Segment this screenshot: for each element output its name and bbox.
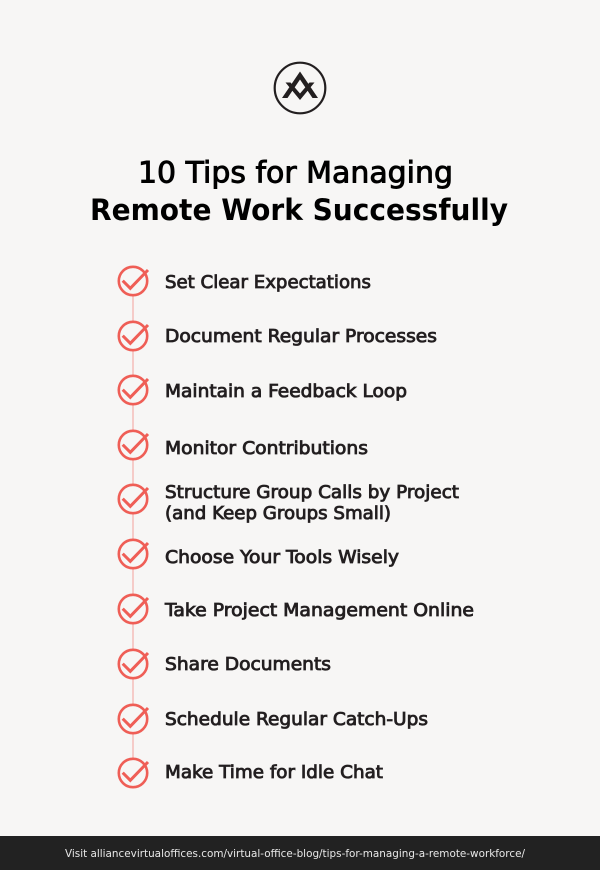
title: Remote Work Successfully: [90, 193, 508, 227]
item 5: Structure Group Calls by Project: [165, 482, 459, 503]
item 4: [118, 430, 368, 460]
checklist: [118, 266, 474, 788]
title: [90, 156, 508, 227]
item 1: Set Clear Expectations: [165, 272, 371, 293]
item 3: Maintain a Feedback Loop: [165, 381, 407, 402]
footer bar: [0, 836, 600, 870]
footer bar: Visit alliancevirtualoffices.com/virtual-office-blog/tips-for-managing-a-remote-workforce/: [65, 848, 525, 860]
item 4: Monitor Contributions: [165, 438, 368, 459]
timeline connector: [132, 281, 134, 773]
item 10: [118, 758, 383, 788]
title: 10 Tips for Managing: [138, 156, 453, 190]
item 9: Schedule Regular Catch-Ups: [165, 709, 428, 730]
item 6: Choose Your Tools Wisely: [165, 547, 399, 568]
logo: [275, 63, 325, 113]
item 3: [118, 376, 407, 404]
item 5: [118, 482, 459, 524]
item 8: Share Documents: [165, 654, 331, 675]
item 10: Make Time for Idle Chat: [165, 762, 383, 783]
item 9: [118, 704, 428, 734]
item 5: (and Keep Groups Small): [165, 503, 391, 524]
item 2: Document Regular Processes: [165, 326, 437, 347]
item 1: [118, 266, 371, 296]
item 2: [118, 322, 437, 350]
item 6: [118, 540, 399, 568]
item 8: [118, 650, 331, 678]
item 7: Take Project Management Online: [164, 600, 474, 621]
item 7: [118, 594, 474, 624]
